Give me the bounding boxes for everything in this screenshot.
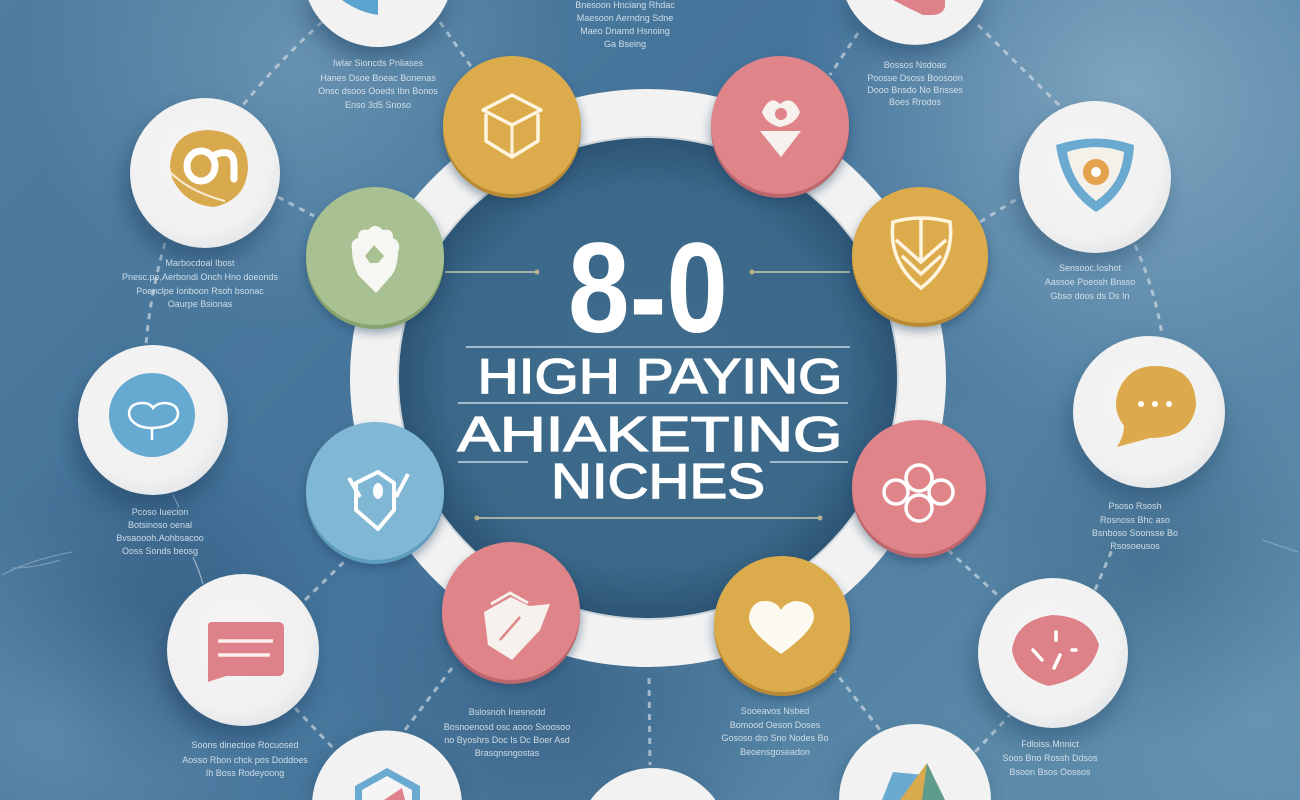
caption: upper left: Marbocdoal Ibost: [165, 258, 235, 268]
caption: left: Bvsaoooh.Aohbsacoo: [116, 533, 204, 543]
caption: lower centre left: Brasqnsngostas: [475, 748, 540, 758]
caption: top left: [318, 58, 438, 110]
caption: upper right: Gbso doos ds Ds In: [1050, 291, 1130, 301]
caption: lower centre right: Sooeavos Nsbed: [741, 706, 809, 716]
node: gold heart: [713, 556, 851, 700]
node: top left: [303, 0, 449, 59]
central ring: [374, 113, 922, 643]
caption: lower centre right: Bomood Oeson Doses: [730, 720, 821, 730]
caption: upper left: Poenclpe Ionboon Rsoh bsonac: [136, 286, 264, 296]
node: lower right pink icon: [973, 578, 1128, 742]
caption: top right: Bossos Nsdoas: [884, 60, 947, 70]
caption: lower centre left: Bslosnoh Inesnodd: [469, 707, 545, 717]
caption: left: Pcoso Iuecion: [132, 507, 188, 517]
caption: lower left: Aosso Rbon chck pos Doddoes: [182, 755, 308, 765]
title number: 0: [666, 217, 728, 360]
caption: lower centre right: Gososo dro Sno Nodes Bo: [721, 733, 829, 743]
caption: top left: Onsc dsoos Ooeds Ibn Bonos: [318, 86, 438, 96]
caption: lower centre left: [444, 707, 570, 758]
node: gold wheat: [851, 187, 989, 331]
node: bottom left hexagon: [308, 730, 462, 800]
caption: top left: Iwlar Sioncds Pnliases: [333, 58, 424, 68]
caption: right: Rosnoss Bhc aso: [1100, 515, 1170, 525]
title number: -: [630, 225, 666, 368]
caption: top right: [867, 60, 963, 107]
caption: top right: Boes Rrodos: [889, 97, 942, 107]
caption: lower centre right: [721, 706, 829, 757]
node: bottom centre: [590, 768, 716, 800]
title line: high paying: HIGH PAYING: [478, 350, 842, 404]
caption: right: [1092, 501, 1178, 551]
caption: lower right: Soos Bno Rossh Ddsos: [1002, 753, 1098, 763]
caption: left: [116, 507, 204, 556]
title line: niches: NICHES: [551, 455, 765, 509]
node: lower left message: [162, 574, 319, 740]
caption: upper left: Oaurpe Bsionas: [168, 299, 233, 309]
node: upper left gold icon: [124, 98, 280, 263]
caption: upper left: Pnesc.pe,Aerbondi Onch Hno doeonds: [122, 272, 279, 282]
caption: lower left: Ih Boss Rodeyoong: [206, 768, 284, 778]
caption: right: Rsosoeusos: [1110, 541, 1160, 551]
node: bottom right image: [836, 724, 991, 800]
caption: right: Bsnboso Soonsse Bo: [1092, 528, 1178, 538]
caption: upper right: Aassoe Poeosh Bnsso: [1045, 277, 1135, 287]
caption: lower centre left: Bosnoenosd osc aooo Sxoosoo: [444, 722, 570, 732]
node: pink handshake: [441, 542, 581, 688]
node: green leaf: [305, 187, 445, 333]
caption: left: Ooss Sonds beosg: [122, 546, 198, 556]
caption: lower centre right: Beoensgoseadon: [740, 747, 810, 757]
title rules: [445, 270, 850, 520]
caption: top centre: [575, 0, 675, 49]
node: right speech bubble: [1069, 336, 1225, 501]
caption: top right: Poosse Dsoss Boosoon: [867, 73, 963, 83]
caption: lower right: Bsoon Bsos Oossos: [1009, 767, 1091, 777]
connectors: [146, 22, 1162, 765]
captions: [116, 0, 1178, 778]
caption: right: Psoso Rsosh: [1108, 501, 1162, 511]
title: [445, 217, 850, 520]
caption: lower left: Soons dinectioe Rocuosed: [191, 740, 299, 750]
caption: upper right: Sensooc.Ioshot: [1059, 263, 1122, 273]
caption: top centre: Maesoon Aerndng Sdne: [577, 13, 673, 23]
title number: 8: [568, 217, 639, 360]
title line: affiliate marketing: AHIAKETING: [458, 408, 842, 462]
caption: top centre: Bnesoon Hnciang Rhdac: [575, 0, 675, 10]
caption: top right: Dooo Bnsdo No Bnsses: [867, 85, 963, 95]
caption: upper left: [122, 258, 279, 309]
caption: lower left: [182, 740, 308, 778]
node: gold cap: [442, 56, 582, 202]
node: left blue icon: [72, 345, 228, 510]
node: pink flower: [710, 56, 850, 202]
node: upper right shield icon: [1014, 101, 1171, 266]
node: top right: [840, 0, 986, 57]
caption: lower centre left: no Byoshrs Doc Is Dc Boer Asd: [444, 735, 570, 745]
caption: lower right: Fdloiss.Mnnict: [1021, 739, 1079, 749]
caption: top left: Enso 3d5 Snoso: [345, 100, 411, 110]
node: pink clover: [851, 420, 987, 562]
caption: upper right: [1045, 263, 1135, 301]
coloured ring nodes: [305, 56, 989, 700]
caption: top centre: Ga Bseing: [604, 39, 646, 49]
caption: left: Botsinoso oenal: [128, 520, 192, 530]
caption: lower right: [1002, 739, 1098, 777]
caption: top left: Hanes Dsoe Boeac Bonenas: [320, 73, 436, 83]
caption: top centre: Maeo Dnamd Hsnoing: [580, 26, 670, 36]
node: blue house: [305, 422, 445, 568]
